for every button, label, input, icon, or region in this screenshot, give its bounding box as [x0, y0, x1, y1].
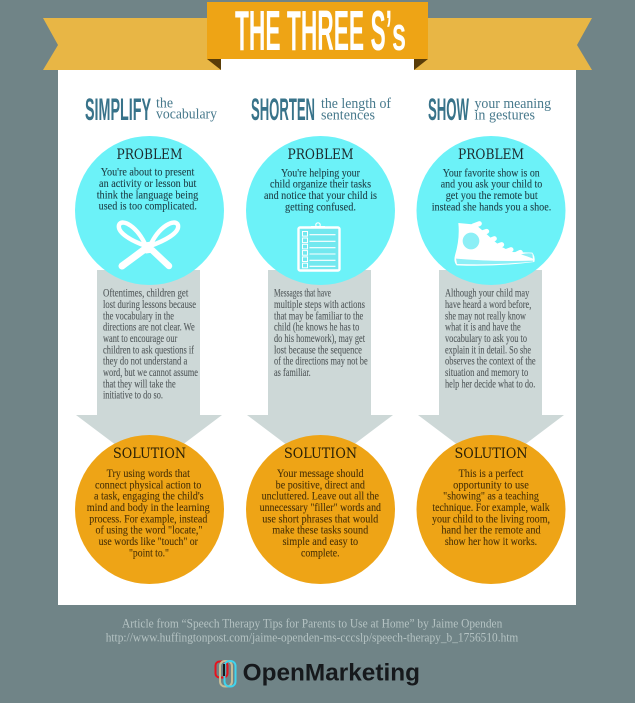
article credit — [106, 617, 519, 645]
solution circle: shorten: be positive, direct and — [276, 477, 365, 491]
body text: shorten: as familiar. — [274, 366, 311, 379]
body text: simplify: initiative to do so. — [103, 389, 163, 402]
solution circle: simplify: a task, engaging the child's — [94, 489, 204, 503]
problem circle: show: get you the remote but — [446, 188, 538, 202]
problem circle: shorten: and notice that your child is — [264, 188, 377, 202]
solution circle: show — [416, 435, 566, 584]
problem circle: show: and you ask your child to — [441, 177, 542, 191]
problem circle: simplify — [75, 136, 224, 285]
body text: shorten: lost because the sequence — [274, 343, 362, 356]
heading: shorten the length of sentences: sentences — [321, 107, 375, 123]
body text: show: vocabulary to ask you to — [445, 332, 527, 345]
problem circle: shorten: child organize their tasks — [270, 177, 371, 191]
white content panel — [58, 59, 576, 605]
solution circle: shorten: uncluttered. Leave out all the — [262, 489, 379, 503]
body text: simplify: directions are not clear. We — [103, 321, 195, 334]
solution circle: show: your child to the living room, — [432, 511, 550, 525]
solution circle: simplify — [75, 435, 224, 584]
arrow: column 1 — [76, 270, 222, 470]
body text: simplify: Oftentimes, children get — [103, 287, 189, 300]
heading: show your meaning in gestures: in gestures — [474, 107, 535, 123]
title banner: THE THREE S’ — [235, 0, 392, 63]
title banner: s — [392, 7, 406, 60]
body text: show: situation and memory to — [445, 366, 528, 379]
body text: simplify — [103, 287, 198, 402]
body text: simplify: children to ask questions if — [103, 343, 194, 356]
body text: show: she may not really know — [445, 309, 526, 322]
solution circle: simplify: of using the word "locate," — [96, 523, 203, 537]
solution circle: shorten: simple and easy to — [282, 534, 358, 548]
heading: simplify the vocabulary: the — [156, 96, 173, 112]
solution circle: shorten: complete. — [301, 545, 340, 559]
body text: show: explain it in detail. So she — [445, 343, 531, 356]
solution circle: show: opportunity to use — [453, 477, 529, 491]
body text: show — [445, 287, 536, 390]
icon: high-top sneaker — [454, 223, 535, 266]
problem circle: shorten: getting confused. — [285, 199, 356, 213]
body text: shorten: child (he knows he has to — [274, 321, 359, 334]
problem circle: shorten — [246, 136, 395, 285]
body text: simplify: the vocabulary in the — [103, 309, 174, 322]
solution circle: simplify: SOLUTION — [113, 446, 186, 462]
solution circle: simplify: connect physical action to — [95, 477, 201, 491]
arrow: column 2 — [247, 270, 393, 470]
problem circle: show: Your favorite show is on — [443, 165, 540, 179]
solution circle: show: This is a perfect — [459, 466, 524, 480]
body text: simplify: word, but we cannot assume — [103, 366, 198, 379]
problem circle: shorten: You're helping your — [281, 165, 360, 179]
solution circle: simplify: "point to." — [129, 545, 169, 559]
title banner — [43, 0, 592, 70]
problem circle: show: PROBLEM — [458, 147, 524, 163]
solution circle: shorten: SOLUTION — [284, 446, 357, 462]
solution circle: simplify: process. For example, instead — [89, 511, 207, 525]
solution circle: show: "showing" as a teaching — [443, 489, 539, 503]
body text: show: help her decide what to do. — [445, 377, 535, 390]
problem circle: simplify: used is too complicated. — [99, 199, 197, 213]
heading: simplify the vocabulary: SIMPLIFY — [85, 91, 151, 127]
problem circle: show: instead she hands you a shoe. — [432, 199, 551, 213]
icon: ribbon bow — [119, 223, 178, 266]
body text: show: observes the context of the — [445, 355, 536, 368]
body text: show: what it is and have the — [445, 321, 521, 334]
body text: simplify: want to encourage our — [103, 332, 177, 345]
heading: show your meaning in gestures: SHOW — [428, 91, 469, 127]
body text: shorten: Messages that have — [274, 287, 331, 300]
solution circle: shorten — [246, 435, 395, 584]
problem circle: shorten: PROBLEM — [288, 147, 354, 163]
article credit: Article from “Speech Therapy Tips for Parents to Use at Home” by Jaime Openden — [122, 617, 503, 631]
body text: shorten: of the directions may not be — [274, 355, 368, 368]
arrow: column 3 — [418, 270, 564, 470]
problem circle: simplify: You're about to present — [101, 165, 195, 179]
solution circle: show: hand her the remote and — [441, 523, 541, 537]
solution circle: shorten: use short phrases that would — [262, 511, 378, 525]
body text: simplify: that they will take the — [103, 377, 176, 390]
solution circle: show: SOLUTION — [454, 446, 528, 462]
heading: simplify the vocabulary: vocabulary — [156, 107, 218, 123]
solution circle: simplify: use words like "touch" or — [99, 534, 198, 548]
solution circle: show: show her how it works. — [445, 534, 537, 548]
solution circle: shorten: unnecessary "filler" words and — [260, 500, 381, 514]
article credit: http://www.huffingtonpost.com/jaime-openden-ms-cccslp/speech-therapy_b_1756510.htm — [106, 631, 519, 645]
problem circle: simplify: think the language being — [97, 187, 198, 201]
body text: shorten — [274, 287, 368, 379]
body text: show: have heard a word before, — [445, 298, 531, 311]
solution circle: show: technique. For example, walk — [432, 500, 550, 514]
body text: shorten: do his homework), may get — [274, 332, 366, 345]
body text: shorten: multiple steps with actions — [274, 298, 365, 311]
heading: shorten the length of sentences: SHORTEN — [251, 91, 315, 127]
OpenMarketing logo: OpenMarketing — [243, 660, 420, 687]
problem circle: simplify: PROBLEM — [116, 147, 182, 163]
problem circle: show — [416, 136, 566, 285]
body text: shorten: that may be familiar to the — [274, 309, 363, 322]
solution circle: shorten: Your message should — [277, 466, 364, 480]
problem circle: simplify: an activity or lesson but — [99, 176, 197, 190]
heading: shorten the length of sentences: the length of — [321, 96, 391, 112]
heading: show your meaning in gestures: your meaning — [474, 96, 551, 112]
body text: simplify: they do not understand a — [103, 355, 187, 368]
body text: show: Although your child may — [445, 287, 529, 300]
solution circle: simplify: Try using words that — [107, 466, 191, 480]
solution circle: simplify: mind and body in the learning — [87, 500, 210, 514]
icon: clipboard checklist — [298, 223, 340, 270]
body text: simplify: lost during lessons because — [103, 298, 196, 311]
solution circle: shorten: make these tasks sound — [272, 523, 368, 537]
